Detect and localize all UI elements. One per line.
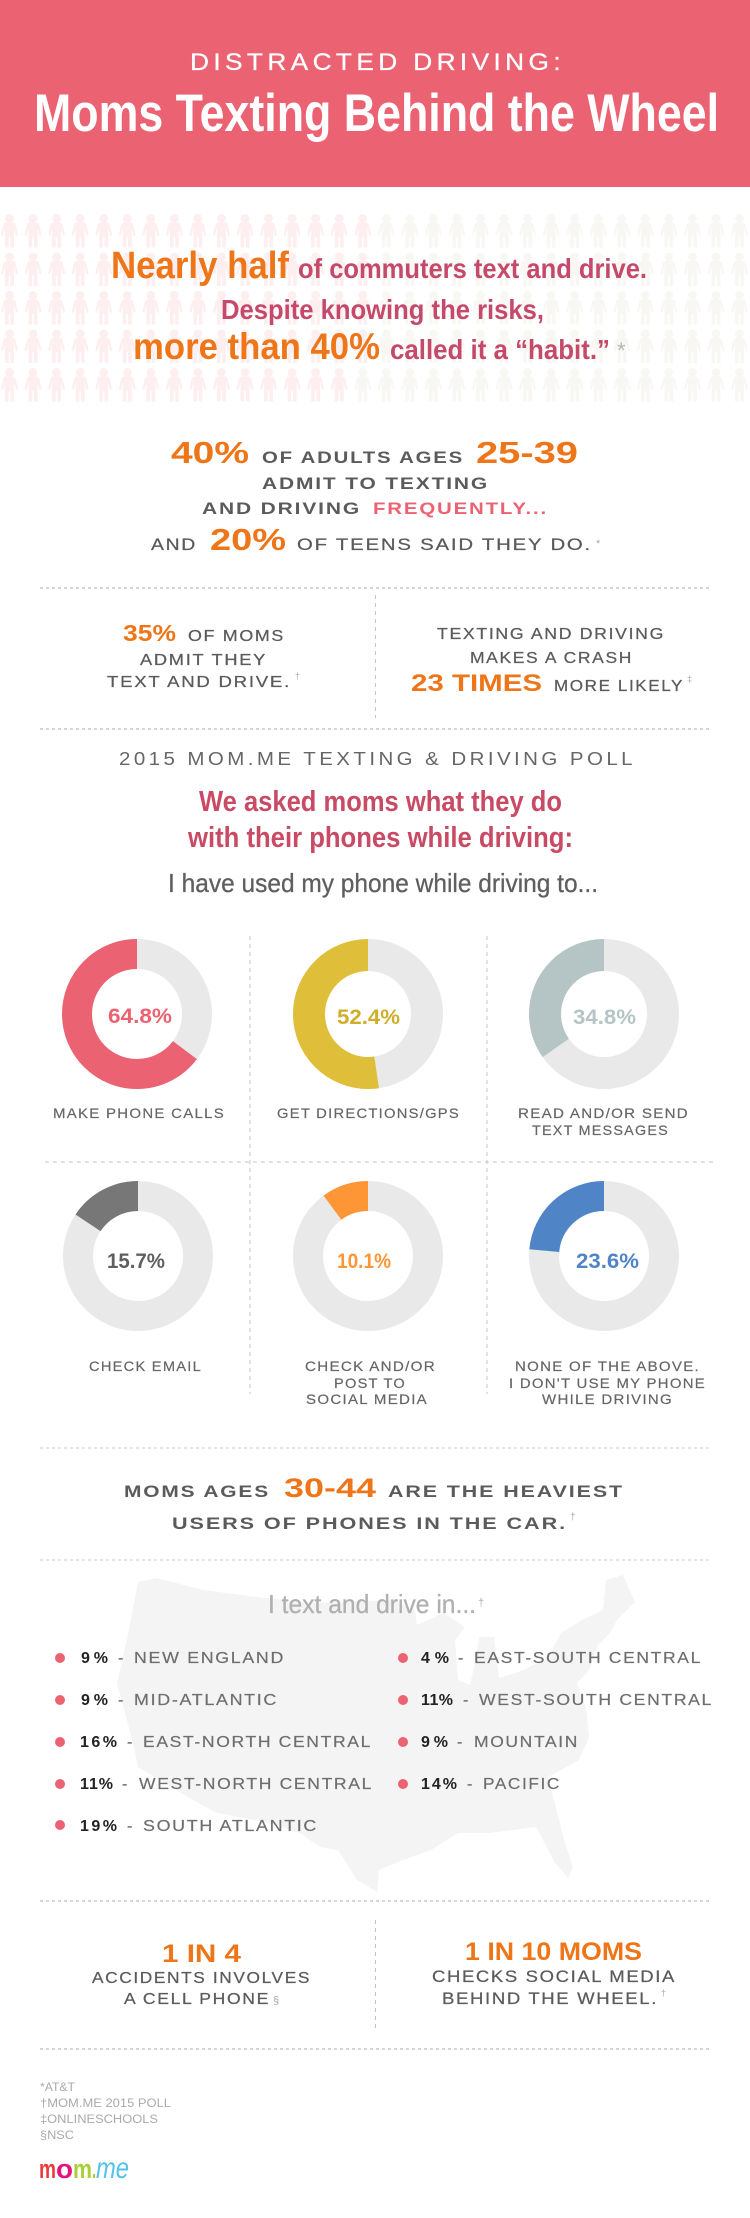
stat: 23 times more likely: MORE LIKELY <box>554 678 684 695</box>
donut: none of the above: NONE OF THE ABOVE. <box>515 1358 700 1374</box>
stat: 35% of moms: OF MOMS <box>188 628 285 645</box>
regional list: right column: 4% <box>421 1650 449 1667</box>
regional list: left column: - <box>127 1734 134 1751</box>
donut: check email <box>78 1196 202 1374</box>
donut: check email: CHECK EMAIL <box>89 1358 202 1374</box>
logo: mom.me: o <box>56 2154 73 2184</box>
people pictogram background <box>0 214 750 404</box>
donut: directions: 52.4% <box>337 1006 400 1029</box>
logo: mom.me: me <box>96 2152 129 2185</box>
stat: 1 in 4: § <box>273 1995 279 2007</box>
regional list: right column: MOUNTAIN <box>474 1734 579 1751</box>
logo: mom.me <box>39 2152 129 2185</box>
map of the United States <box>117 1575 635 1892</box>
regional list: right column: 14% <box>421 1776 457 1793</box>
lead statement: of commuters text and drive. <box>298 253 647 284</box>
stat: 1 in 4: A CELL PHONE <box>124 1991 270 2008</box>
stat: moms ages 30-44: 30-44 <box>284 1473 376 1503</box>
logo: mom.me: m <box>39 2154 56 2184</box>
source footnotes: ‡ONLINESCHOOLS <box>40 2112 158 2126</box>
poll heading: I have used my phone while driving to... <box>168 868 598 898</box>
regional list: left column: 9% <box>81 1650 108 1667</box>
header banner <box>0 0 750 187</box>
stat: 40% of adults: * <box>596 538 601 550</box>
stat: 23 times more likely: MAKES A CRASH <box>470 650 633 667</box>
header kicker: DISTRACTED DRIVING: <box>190 49 565 76</box>
regional list: right column: PACIFIC <box>483 1776 561 1793</box>
lead statement: * <box>617 338 626 363</box>
stat: 1 in 10 moms: 1 IN 10 MOMS <box>465 1938 642 1966</box>
regional list: right column <box>398 1650 713 1793</box>
stat: 1 in 10 moms: † <box>661 1988 666 1998</box>
regional list: left column: EAST-NORTH CENTRAL <box>143 1734 372 1751</box>
source footnotes <box>40 2080 171 2142</box>
stat: 1 in 10 moms: CHECKS SOCIAL MEDIA <box>432 1967 676 1986</box>
regional list: left column: NEW ENGLAND <box>134 1650 285 1667</box>
donut: social media <box>305 1196 436 1407</box>
donut: directions <box>277 955 460 1121</box>
donut: none of the above: 23.6% <box>576 1250 639 1273</box>
source footnotes: †MOM.ME 2015 POLL <box>40 2096 171 2110</box>
stat: 35% of moms: TEXT AND DRIVE. <box>107 674 291 691</box>
stat: 1 in 10 moms <box>432 1938 676 2008</box>
source footnotes: §NSC <box>40 2128 74 2142</box>
donut: text messages <box>518 955 689 1138</box>
stat: 23 times more likely <box>411 626 692 697</box>
lead statement: Nearly half <box>111 245 289 287</box>
map heading: I text and drive in... <box>268 1589 476 1619</box>
stat: 1 in 10 moms: BEHIND THE WHEEL. <box>442 1989 658 2008</box>
poll heading <box>119 749 636 898</box>
regional list: left column: 9% <box>81 1692 108 1709</box>
regional list: left column: 11% <box>80 1776 113 1793</box>
regional list: left column: - <box>118 1692 125 1709</box>
stat: moms ages 30-44: ARE THE HEAVIEST <box>388 1482 624 1501</box>
logo: mom.me: m <box>73 2154 92 2184</box>
stat: 40% of adults: AND DRIVING <box>202 499 361 518</box>
donut: check email: 15.7% <box>107 1250 165 1273</box>
regional list: right column: 11% <box>421 1692 453 1709</box>
stat: 40% of adults: OF TEENS SAID THEY DO. <box>297 535 592 554</box>
stat: 1 in 4: ACCIDENTS INVOLVES <box>92 1970 311 1987</box>
lead statement: called it a “habit.” <box>390 334 610 365</box>
regional list: left column: 16% <box>80 1734 117 1751</box>
donut: make phone calls: MAKE PHONE CALLS <box>53 1105 225 1121</box>
donut: text messages: READ AND/OR SEND <box>518 1105 689 1121</box>
regional list: left column: SOUTH ATLANTIC <box>143 1818 318 1835</box>
lead statement: more than 40% <box>133 326 380 367</box>
stat: 40% of adults: 20% <box>210 522 286 557</box>
regional list: right column: 9% <box>421 1734 448 1751</box>
donut: text messages: 34.8% <box>573 1006 636 1029</box>
regional list: right column: - <box>458 1650 465 1667</box>
donut: none of the above: I DON'T USE MY PHONE <box>509 1375 706 1391</box>
poll heading: We asked moms what they do <box>199 786 562 818</box>
regional list: right column: - <box>467 1776 474 1793</box>
regional list: right column: EAST-SOUTH CENTRAL <box>474 1650 702 1667</box>
regional list: left column <box>55 1650 373 1835</box>
stat: moms ages 30-44: † <box>570 1512 576 1523</box>
regional list: left column: - <box>127 1818 134 1835</box>
donut: none of the above: WHILE DRIVING <box>542 1391 673 1407</box>
stat: 23 times more likely: 23 TIMES <box>411 670 542 697</box>
stat: 1 in 4 <box>92 1940 311 2008</box>
stat: 40% of adults: OF ADULTS AGES <box>262 448 464 467</box>
regional list: right column: - <box>457 1734 464 1751</box>
regional list: left column: MID-ATLANTIC <box>134 1692 278 1709</box>
lead statement: Despite knowing the risks, <box>221 294 544 325</box>
stat: 40% of adults <box>151 435 601 557</box>
donut: social media: 10.1% <box>337 1250 391 1273</box>
donut: social media: CHECK AND/OR <box>305 1358 436 1374</box>
stat: 40% of adults: FREQUENTLY... <box>373 499 548 518</box>
poll heading: 2015 MOM.ME TEXTING & DRIVING POLL <box>119 749 636 769</box>
donut: make phone calls <box>53 954 225 1121</box>
donut: social media: POST TO <box>334 1375 406 1391</box>
donut: none of the above <box>509 1196 706 1407</box>
lead statement <box>111 245 647 367</box>
regional list: left column: - <box>118 1650 125 1667</box>
stat: 35% of moms: ADMIT THEY <box>140 652 267 669</box>
stat: 23 times more likely: TEXTING AND DRIVING <box>437 626 665 643</box>
stat: moms ages 30-44: MOMS AGES <box>124 1482 270 1501</box>
donut: make phone calls: 64.8% <box>108 1005 172 1028</box>
regional list: left column: - <box>122 1776 129 1793</box>
logo: mom.me: . <box>92 2154 96 2184</box>
stat: moms ages 30-44 <box>124 1473 624 1533</box>
stat: 35% of moms <box>107 620 300 691</box>
stat: 40% of adults: AND <box>151 535 197 554</box>
donut: social media: SOCIAL MEDIA <box>306 1391 428 1407</box>
stat: 40% of adults: 40% <box>171 435 249 470</box>
stat: 35% of moms: † <box>295 671 300 681</box>
stat: moms ages 30-44: USERS OF PHONES IN THE CAR. <box>172 1514 567 1533</box>
source footnotes: *AT&T <box>40 2080 76 2094</box>
stat: 1 in 4: 1 IN 4 <box>162 1940 241 1968</box>
poll heading: with their phones while driving: <box>187 822 573 854</box>
stat: 40% of adults: ADMIT TO TEXTING <box>262 474 489 493</box>
donut: directions: GET DIRECTIONS/GPS <box>277 1105 460 1121</box>
regional list: left column: WEST-NORTH CENTRAL <box>139 1776 373 1793</box>
stat: 35% of moms: 35% <box>123 620 176 646</box>
donut: text messages: TEXT MESSAGES <box>532 1122 669 1138</box>
stat: 40% of adults: 25-39 <box>476 435 578 470</box>
regional list: right column: - <box>463 1692 470 1709</box>
stat: 23 times more likely: ‡ <box>687 674 692 684</box>
regional list: right column: WEST-SOUTH CENTRAL <box>479 1692 713 1709</box>
map heading: † <box>478 1597 484 1609</box>
regional list: left column: 19% <box>80 1818 117 1835</box>
